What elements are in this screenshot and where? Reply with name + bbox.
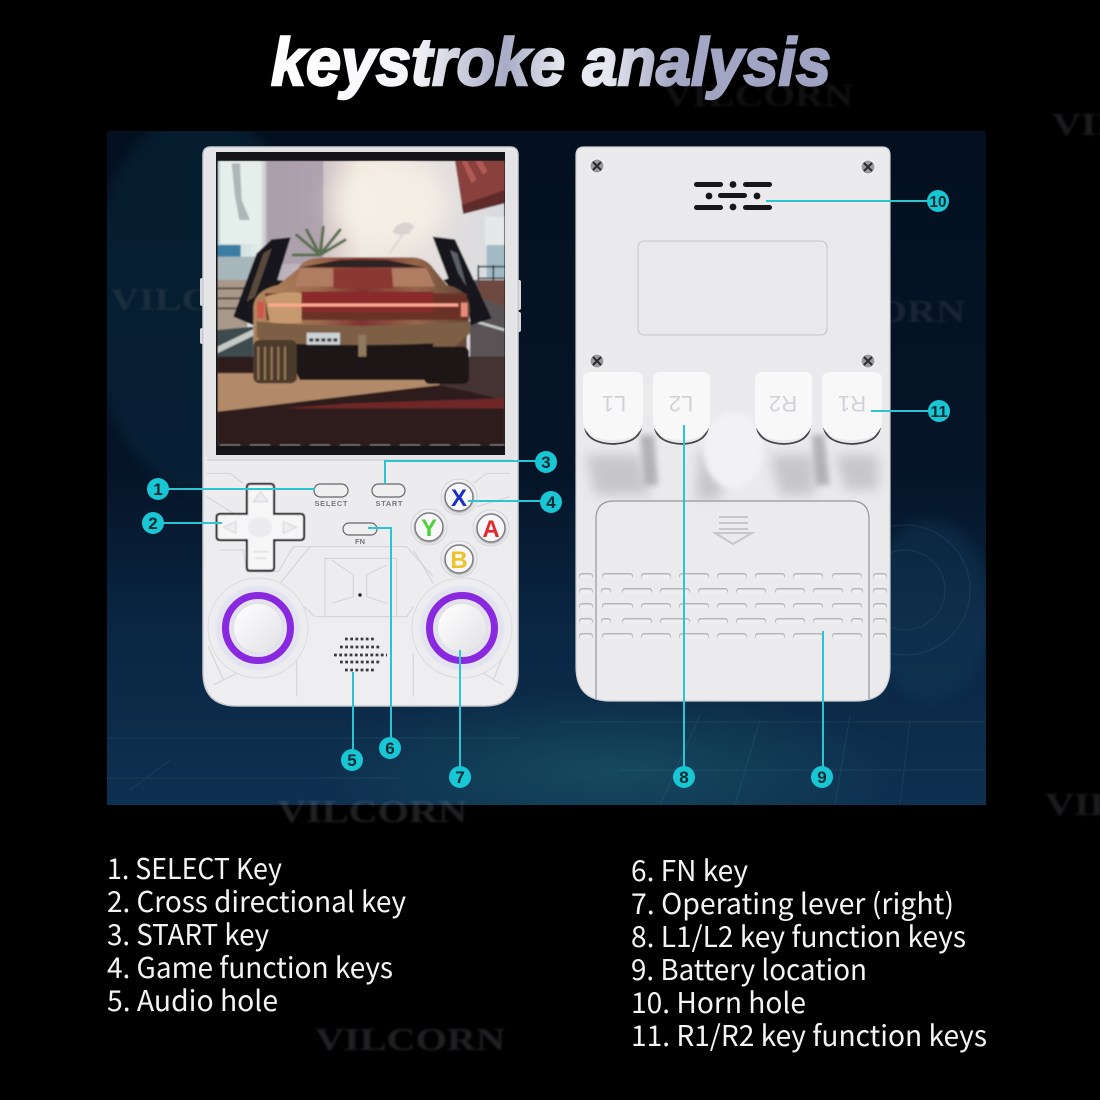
- legend: right column: 8. L1/L2 key function keys: [631, 915, 966, 956]
- callout 11: 11: [930, 404, 948, 421]
- watermarks: VILCORN: [663, 77, 853, 113]
- icon: action buttons XYAB: A: [482, 516, 500, 543]
- side buttons: [200, 278, 521, 344]
- icon: d-pad: [217, 484, 304, 571]
- slide arrow: [715, 517, 752, 544]
- L1 key: [583, 372, 643, 444]
- callout 11: [928, 400, 950, 422]
- callout 9: [811, 766, 833, 788]
- R1 key: [822, 372, 882, 444]
- legend: left column: 5. Audio hole: [107, 979, 278, 1020]
- device: back view: [576, 147, 890, 701]
- legend: right column: 10. Horn hole: [631, 981, 806, 1022]
- watermarks: VILCORN: [775, 293, 965, 329]
- battery cover: [582, 501, 884, 699]
- callout 5: 5: [347, 751, 357, 770]
- R2 key: R2: [769, 391, 797, 416]
- R2 key: [755, 372, 812, 444]
- legend: left column: 1. SELECT Key: [107, 847, 282, 888]
- legend: right column: 9. Battery location: [631, 948, 867, 989]
- car: [253, 257, 470, 382]
- callout 1: [147, 478, 169, 500]
- icon: center dot: [358, 593, 362, 597]
- callout 10: 10: [930, 194, 947, 211]
- SELECT button: [314, 484, 348, 508]
- game screen: [216, 152, 505, 455]
- callout 9: 9: [817, 768, 827, 787]
- icon: left joystick: [208, 578, 308, 678]
- watermarks: VILCORN: [277, 793, 467, 829]
- doors: [233, 237, 291, 326]
- legend: right column: 6. FN key: [631, 849, 748, 890]
- screws: [590, 159, 875, 368]
- grip ridges: [582, 576, 884, 637]
- callout 3: [535, 451, 557, 473]
- legend: right column: 11. R1/R2 key function keys: [631, 1014, 987, 1055]
- callout 8: 8: [679, 768, 689, 787]
- icon: audio hole grille: [334, 639, 387, 670]
- plate lines: [207, 473, 510, 697]
- back shell: [576, 147, 890, 701]
- callout 2: 2: [148, 514, 158, 533]
- battery label recess: [638, 241, 827, 335]
- icon: right joystick: [412, 578, 512, 678]
- callout numbers: [142, 190, 950, 788]
- icon: action buttons XYAB: [411, 479, 509, 577]
- panel: dark blue product backdrop: [107, 131, 986, 805]
- icon: action buttons XYAB: Y: [421, 515, 437, 542]
- FN button: [343, 523, 377, 546]
- palm: [293, 227, 345, 255]
- icon: action buttons XYAB: B: [450, 547, 468, 574]
- legend: right column: [631, 849, 987, 1055]
- console body: [203, 147, 518, 706]
- R1 key: R1: [838, 391, 866, 416]
- legend: left column: 3. START key: [107, 913, 269, 954]
- watermarks: VILCORN: [110, 281, 300, 317]
- watermarks: VILCORN: [315, 1021, 505, 1057]
- L1 key: L1: [602, 391, 626, 416]
- legend: left column: 4. Game function keys: [107, 946, 393, 987]
- device: front view: [200, 147, 521, 706]
- road: [217, 357, 505, 446]
- callout 6: 6: [385, 739, 395, 758]
- shoulder shadows: [586, 412, 878, 500]
- callout 1: 1: [153, 480, 163, 499]
- callout 2: [142, 512, 164, 534]
- callout 7: 7: [455, 768, 465, 787]
- callout 10: [927, 190, 949, 212]
- L2 key: [653, 372, 710, 444]
- callout 4: 4: [546, 493, 556, 512]
- speaker slots: [694, 181, 772, 210]
- callout 3: 3: [541, 453, 551, 472]
- callout lines: [162, 201, 930, 767]
- callout 7: [449, 766, 471, 788]
- callout 8: [673, 766, 695, 788]
- START button: START: [376, 499, 403, 508]
- title: keystroke analysis: [271, 25, 831, 100]
- SELECT button: SELECT: [314, 499, 348, 508]
- callout 6: [379, 737, 401, 759]
- FN button: FN: [355, 537, 365, 546]
- START button: [372, 484, 405, 508]
- L2 key: L2: [669, 391, 693, 416]
- shoulder keys: [583, 372, 882, 444]
- legend: left column: 2. Cross directional key: [107, 880, 406, 921]
- callout 5: [341, 749, 363, 771]
- legend: right column: 7. Operating lever (right): [631, 882, 954, 923]
- callout 4: [540, 491, 562, 513]
- legend: left column: [107, 847, 406, 1020]
- icon: action buttons XYAB: X: [451, 485, 467, 512]
